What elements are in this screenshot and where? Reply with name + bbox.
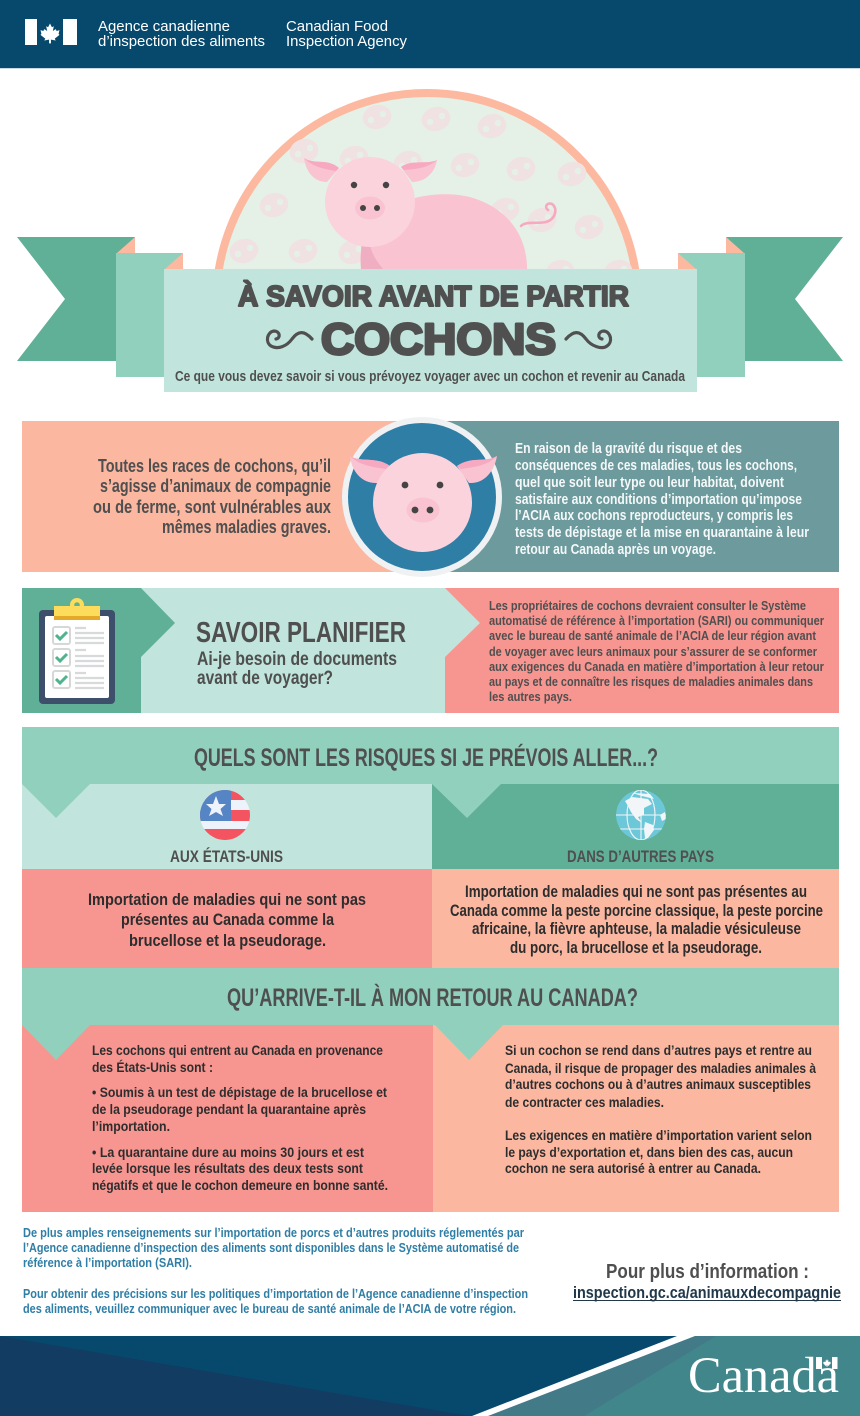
column: United States <box>22 784 432 869</box>
right statement: quel que soit leur type ou leur habitat, doivent <box>515 475 784 491</box>
agency name in French: Agence canadienne <box>98 18 230 35</box>
Canada wordmark: Canada <box>688 1348 839 1404</box>
further information text: référence à l’importation (SARI). <box>23 1256 192 1270</box>
return: from United States: des États-Unis sont : <box>92 1059 213 1075</box>
left statement: Toutes les races de cochons, qu’il <box>98 456 331 476</box>
title word: COCHONS <box>321 315 556 364</box>
left statement <box>93 456 331 537</box>
left statement: ou de ferme, sont vulnérables aux <box>93 497 331 517</box>
title line: À SAVOIR AVANT DE PARTIR <box>238 279 629 313</box>
further information text: Pour obtenir des précisions sur les politiques d’importation de l’Agence canadienne d’inspection <box>23 1287 528 1301</box>
risk: other countries: du porc, la brucellose et la pseudorage. <box>510 938 762 957</box>
icon: clipboard <box>39 598 115 704</box>
left statement: s’agisse d’animaux de compagnie <box>100 476 331 496</box>
pig illustration <box>304 157 555 269</box>
agency name in French: d’inspection des aliments <box>98 33 265 50</box>
icon: US flag <box>200 790 250 840</box>
return: from United States <box>22 1025 433 1212</box>
icon: Canada flag signature <box>25 19 77 45</box>
agency name in English: Inspection Agency <box>286 33 407 50</box>
panel: risks <box>22 727 839 968</box>
return: from United States: de la pseudorage pendant la quarantaine après <box>92 1101 366 1117</box>
contact heading: Pour plus d’information : <box>606 1261 809 1283</box>
return: from United States: négatifs et que le cochon demeure en bonne santé. <box>92 1177 388 1193</box>
right statement: satisfaire aux conditions d’importation qu’impose <box>515 492 802 508</box>
subtitle: Ce que vous devez savoir si vous prévoyez voyager avec un cochon et revenir au Canada <box>175 369 686 385</box>
panel: return to Canada <box>22 968 839 1212</box>
risk: United States: brucellose et la pseudorage. <box>129 931 326 950</box>
return heading: QU’ARRIVE-T-IL À MON RETOUR AU CANADA? <box>227 983 638 1012</box>
right statement <box>515 441 809 558</box>
risks heading: QUELS SONT LES RISQUES SI JE PRÉVOIS ALLER...? <box>194 743 658 772</box>
question <box>197 649 397 689</box>
agency name in French <box>98 18 265 50</box>
risk: United States: Importation de maladies qui ne sont pas <box>88 890 366 909</box>
icon: pig face medallion <box>345 420 499 574</box>
risk: United States <box>22 869 432 968</box>
further information text <box>23 1226 528 1316</box>
return: from other countries: cochon ne sera autorisé à entrer au Canada. <box>505 1160 761 1176</box>
return: from United States: Les cochons qui entrent au Canada en provenance <box>92 1042 383 1058</box>
ribbon tails <box>17 237 843 377</box>
title ribbon <box>17 237 843 392</box>
risk: United States: présentes au Canada comme la <box>121 910 334 929</box>
left statement: mêmes maladies graves. <box>162 517 331 537</box>
further information text: De plus amples renseignements sur l’importation de porcs et d’autres produits réglementés par <box>23 1226 524 1240</box>
panel: susceptibility <box>22 420 839 574</box>
panel: savoir planifier <box>22 588 839 713</box>
return: from other countries: le pays d’exportation et, dans bien des cas, aucun <box>505 1144 793 1160</box>
return: from other countries: Les exigences en matière d’importation varient selon <box>505 1127 812 1143</box>
icon: globe <box>616 790 666 840</box>
return: from other countries: de contracter ces maladies. <box>505 1094 664 1110</box>
return: from other countries <box>433 1025 839 1212</box>
return: from United States: • La quarantaine dure au moins 30 jours et est <box>92 1144 364 1160</box>
return: from other countries: d’autres cochons ou à d’autres animaux susceptibles <box>505 1076 811 1092</box>
return: from United States: levée lorsque les résultats des deux tests sont <box>92 1160 363 1176</box>
label: AUX ÉTATS-UNIS <box>170 847 283 866</box>
agency name in English <box>286 18 407 50</box>
question: Ai-je besoin de documents <box>197 649 397 670</box>
return: from other countries: Si un cochon se rend dans d’autres pays et rentre au <box>505 1042 812 1058</box>
right statement: En raison de la gravité du risque et des <box>515 441 742 457</box>
return: from United States: • Soumis à un test de dépistage de la brucellose et <box>92 1084 387 1100</box>
snout pattern <box>230 105 632 269</box>
planning text <box>489 598 824 704</box>
return: from other countries: Canada, il risque de propager des maladies animales à <box>505 1060 816 1076</box>
header band <box>0 0 860 69</box>
heading: SAVOIR PLANIFIER <box>196 617 406 649</box>
agency name in English: Canadian Food <box>286 18 388 35</box>
dome with pig <box>214 89 640 269</box>
flourishes <box>267 331 611 348</box>
right statement: l’ACIA aux cochons reproducteurs, y compris les <box>515 508 793 524</box>
right statement: retour au Canada après un voyage. <box>515 542 716 558</box>
footer band <box>0 1336 860 1416</box>
right statement: tests de dépistage et la mise en quarantaine à leur <box>515 525 809 541</box>
question: avant de voyager? <box>197 668 333 689</box>
return: from United States: l’importation. <box>92 1118 170 1134</box>
planning text: les autres pays. <box>489 689 572 704</box>
risk: other countries <box>432 869 839 968</box>
column: other countries <box>432 784 839 869</box>
right statement: conséquences de ces maladies, tous les cochons, <box>515 458 797 474</box>
planning text: Les propriétaires de cochons devraient consulter le Système <box>489 598 806 613</box>
further information text: l’Agence canadienne d’inspection des aliments sont disponibles dans le Système automatisé de <box>23 1241 519 1255</box>
further information text: des aliments, veuillez communiquer avec le bureau de santé animale de l’ACIA de votre région. <box>23 1302 516 1316</box>
label: DANS D’AUTRES PAYS <box>567 847 714 866</box>
